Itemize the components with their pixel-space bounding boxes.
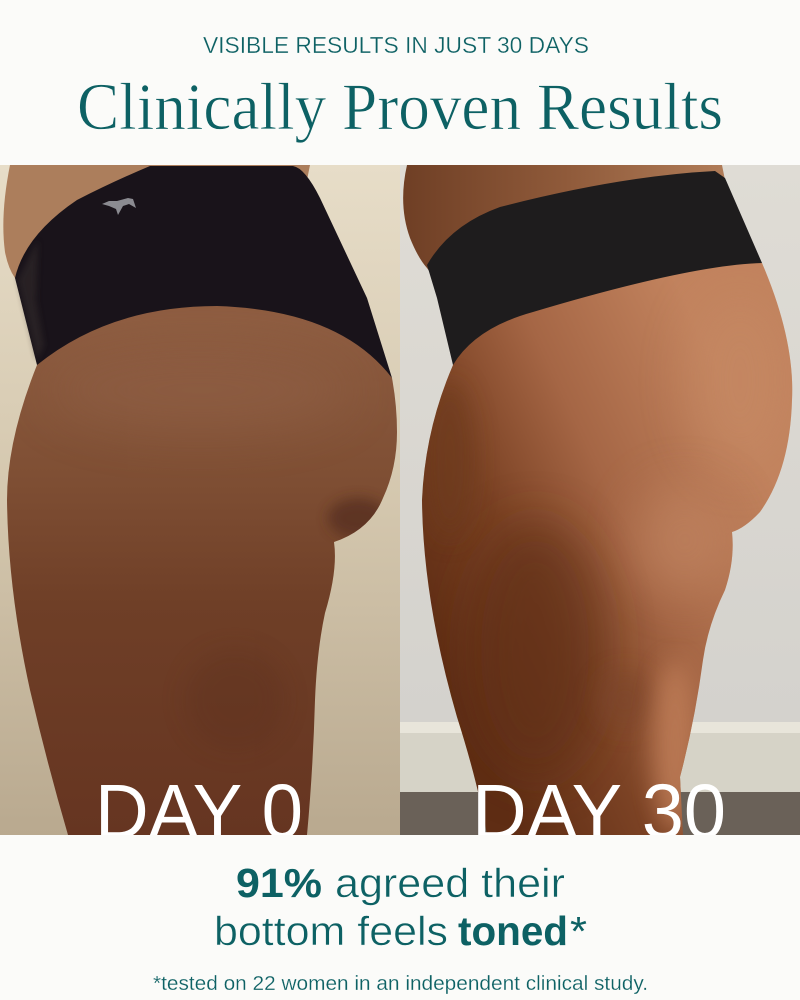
wall bbox=[400, 165, 800, 722]
skin above waistband bbox=[403, 165, 724, 271]
label: day 30: DAY 30 bbox=[472, 769, 726, 855]
text block: 91 percent statistic: toned bbox=[458, 908, 568, 954]
panel: day 0 photo bbox=[0, 165, 400, 835]
text block: 91 percent statistic: 91% bbox=[236, 860, 322, 906]
label: day 0: DAY 0 bbox=[95, 769, 303, 855]
title: Clinically Proven Results bbox=[77, 70, 723, 144]
body bbox=[0, 270, 400, 835]
text block: 91 percent statistic: agreed their bbox=[335, 860, 565, 906]
text block: 91 percent statistic bbox=[214, 860, 587, 954]
text block: 91 percent statistic: * bbox=[570, 908, 587, 954]
floor bbox=[400, 792, 800, 835]
skin above waistband bbox=[3, 165, 310, 290]
underwear bbox=[427, 171, 762, 365]
body bbox=[422, 262, 792, 835]
baseboard highlight bbox=[400, 722, 800, 733]
waistband edge sheen bbox=[18, 240, 44, 360]
underwear bbox=[15, 166, 392, 378]
logo mark bbox=[102, 198, 136, 215]
baseboard bbox=[400, 733, 800, 792]
panel: day 30 photo bbox=[400, 165, 800, 835]
footnote: *tested on 22 women in an independent clinical study. bbox=[153, 973, 648, 995]
text block: 91 percent statistic: bottom feels bbox=[214, 908, 448, 954]
eyebrow heading: VISIBLE RESULTS IN JUST 30 DAYS bbox=[203, 32, 589, 58]
wall bbox=[0, 165, 400, 835]
